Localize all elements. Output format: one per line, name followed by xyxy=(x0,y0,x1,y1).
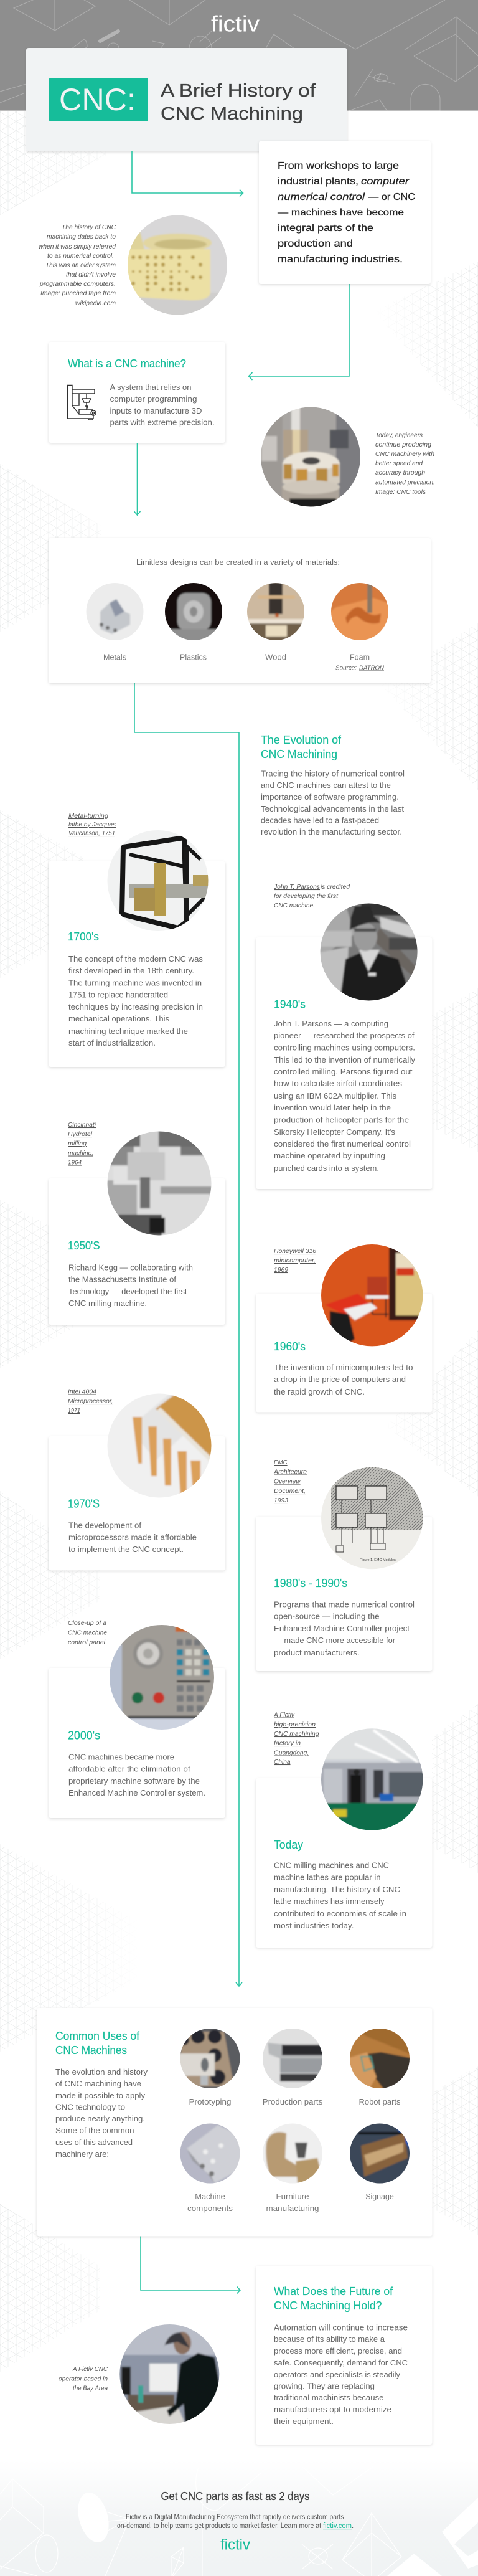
text: common uses: machinery are: xyxy=(55,2149,109,2159)
image: EMC diagram: Figure 1. EMC Modules xyxy=(360,1558,396,1562)
image: Hydrotel milling machine xyxy=(107,1131,212,1236)
labels: materials: Wood xyxy=(265,653,286,661)
caption: operator: the Bay Area xyxy=(73,2384,108,2392)
text: future: traditional machinists because xyxy=(274,2393,383,2402)
text: future: their equipment. xyxy=(274,2417,334,2426)
text: 1940s xyxy=(274,1019,416,1173)
caption: Cincinnati Hydrotel: machine, xyxy=(68,1150,93,1157)
panel: 1700s xyxy=(49,830,225,1067)
caption: lathe: Metal-turning xyxy=(68,812,108,820)
heading: common uses xyxy=(55,2030,140,2057)
title badge: CNC xyxy=(49,78,148,121)
text: common uses: made it possible to apply xyxy=(55,2091,145,2100)
image: EMC diagram xyxy=(321,1467,423,1570)
label: row two: Machine xyxy=(195,2192,225,2201)
caption: John T. Parsons: CNC machine. xyxy=(274,902,315,909)
panel: today xyxy=(256,1725,432,1948)
text: future: growing. They are replacing xyxy=(274,2382,375,2390)
caption: Cincinnati Hydrotel xyxy=(68,1121,96,1166)
heading: 1980s-1990s: 1980's - 1990's xyxy=(274,1577,347,1589)
text: future xyxy=(274,2323,408,2426)
text: 1970s: The development of xyxy=(68,1521,141,1530)
panel: 1980s-1990s xyxy=(256,1467,432,1671)
caption: EMC architecture: Document, xyxy=(274,1487,306,1495)
text: 1970s: to implement the CNC concept. xyxy=(68,1545,184,1554)
panel: intro xyxy=(259,141,431,284)
label: row one: Production parts xyxy=(263,2097,323,2106)
source credit xyxy=(335,664,384,671)
text: today: CNC milling machines and CNC xyxy=(274,1861,389,1870)
text: 1980s-1990s: open-source — including the xyxy=(274,1612,380,1621)
text: future: process more efficient, precise, and xyxy=(274,2346,402,2356)
caption: cutting tool xyxy=(375,432,435,496)
text: common uses: uses of this advanced xyxy=(55,2138,133,2147)
caption: Intel 4004 xyxy=(68,1388,113,1414)
text: 1940s: production of helicopter parts for the xyxy=(274,1115,409,1125)
text: 2000s: Enhanced Machine Controller system. xyxy=(68,1788,205,1797)
text: 1700s: machining technique marked the xyxy=(68,1026,188,1036)
caption: Honeywell 316: Honeywell 316 xyxy=(274,1248,316,1255)
heading: 1950s: 1950'S xyxy=(68,1239,100,1252)
text: 1950s: the Massachusetts Institute of xyxy=(68,1274,176,1284)
text: evolution: importance of software programming. xyxy=(261,792,399,802)
panel: 2000s xyxy=(49,1621,225,1818)
heading: 1700s: 1700's xyxy=(68,930,99,943)
image: lathe xyxy=(107,830,210,931)
title badge: CNC: CNC: xyxy=(59,82,136,117)
caption: Intel 4004: Microprocessor, xyxy=(68,1398,113,1405)
text: today xyxy=(274,1861,406,1930)
text: 1700s: first developed in the 18th century. xyxy=(68,966,194,975)
label: row one: Prototyping xyxy=(189,2097,232,2106)
caption: EMC architecture: Overview xyxy=(274,1477,301,1485)
caption: operator: A Fictiv CNC xyxy=(72,2365,108,2373)
image: cutting tool xyxy=(261,407,360,507)
header band xyxy=(0,0,478,111)
label: row two: Furniture xyxy=(276,2192,309,2201)
heading: future: What Does the Future of xyxy=(274,2285,393,2298)
caption: lathe: lathe by Jacques xyxy=(68,821,116,828)
caption: Honeywell 316 xyxy=(274,1248,316,1274)
caption: operator: operator based in xyxy=(59,2375,108,2383)
text: common uses: of CNC machining have xyxy=(55,2079,141,2088)
label: row two xyxy=(187,2192,394,2213)
image: control panel xyxy=(110,1625,214,1730)
heading: future xyxy=(274,2285,393,2312)
panel: common uses xyxy=(37,2008,432,2236)
footer text: on-demand, to help teams get products to market faster. Learn more at xyxy=(117,2522,322,2530)
caption: punched tape: machining dates back to xyxy=(47,233,116,240)
text: today: machine lathes are popular in xyxy=(274,1872,381,1882)
label: row one xyxy=(189,2097,401,2106)
text: 1700s: The concept of the modern CNC was xyxy=(68,954,203,964)
text: 1940s: This led to the invention of numerically xyxy=(274,1055,416,1064)
arrow: common uses to future xyxy=(141,2236,240,2293)
panel: intro: manufacturing industries. xyxy=(278,254,403,265)
text: common uses: produce nearly anything. xyxy=(55,2114,145,2123)
text: 1700s: The turning machine was invented in xyxy=(68,978,202,988)
caption: cutting tool: continue producing xyxy=(375,441,431,448)
panel: intro: From workshops to large xyxy=(278,161,399,171)
arrow: title to intro xyxy=(132,151,243,197)
text: common uses: Some of the common xyxy=(55,2126,134,2135)
text: 1940s: pioneer — researched the prospects of xyxy=(274,1031,415,1040)
caption: cutting tool: better speed and xyxy=(375,460,423,467)
text: what is a CNC machine: computer programming xyxy=(110,394,197,404)
caption: Cincinnati Hydrotel: milling xyxy=(68,1140,87,1147)
text: 1940s: controlling machines using computers. xyxy=(274,1043,415,1053)
text: 1940s: how to calculate airfoil coordinates xyxy=(274,1079,403,1088)
text: what is a CNC machine: A system that relies on xyxy=(110,382,192,392)
text: today: most industries today. xyxy=(274,1921,354,1930)
caption: cutting tool: automated precision. xyxy=(375,478,435,486)
image: operator xyxy=(120,2324,219,2424)
labels: materials xyxy=(103,653,370,661)
image: signage xyxy=(350,2124,410,2184)
caption: cutting tool: Image: CNC tools xyxy=(375,488,426,496)
caption: punched tape: The history of CNC xyxy=(62,224,116,231)
text: 1960s xyxy=(274,1363,413,1396)
text: materials intro: Limitless designs can be created in a variety of materials: xyxy=(136,557,340,567)
caption: John T. Parsons: is credited xyxy=(321,883,350,891)
image: robot parts xyxy=(350,2029,410,2088)
text: evolution: Tracing the history of numerical control xyxy=(261,769,405,779)
caption: EMC architecture: 1993 xyxy=(274,1497,288,1504)
text: 1960s: a drop in the price of computers and xyxy=(274,1375,406,1384)
panel: 1950s xyxy=(49,1128,225,1325)
source credit: Source: xyxy=(335,664,357,671)
text: 1950s xyxy=(68,1263,193,1308)
heading: common uses: CNC Machines xyxy=(55,2044,127,2057)
label: row two: manufacturing xyxy=(266,2204,319,2213)
text: what is a CNC machine: parts with extreme precision. xyxy=(110,417,214,427)
text: 1700s: mechanical operations. This xyxy=(68,1014,170,1023)
caption: punched tape: that didn't involve xyxy=(66,271,116,278)
footer text: . xyxy=(352,2522,354,2530)
panel: intro: computer xyxy=(361,176,410,187)
text: 1950s: CNC milling machine. xyxy=(68,1299,147,1308)
image: punched tape xyxy=(128,215,227,315)
heading: 1970s: 1970'S xyxy=(68,1497,100,1510)
text: 1940s: controlled milling. Parsons figured out xyxy=(274,1067,413,1076)
image: Intel 4004 xyxy=(107,1394,212,1497)
panel: 1970s xyxy=(49,1390,225,1571)
label: row one: Robot parts xyxy=(358,2097,401,2106)
text: 1970s xyxy=(68,1521,197,1554)
caption: Cincinnati Hydrotel: 1964 xyxy=(68,1158,82,1166)
panel: intro: industrial plants, xyxy=(278,176,358,187)
caption: John T. Parsons xyxy=(273,883,350,909)
heading: evolution: CNC Machining xyxy=(261,748,337,760)
text: today: contributed to economies of scale in xyxy=(274,1909,406,1918)
labels: materials: Foam xyxy=(350,653,370,661)
panel: intro: numerical control xyxy=(278,192,365,202)
image: furniture xyxy=(263,2124,322,2184)
caption: punched tape: wikipedia.com xyxy=(75,300,116,307)
image: wood xyxy=(247,583,304,640)
caption: control panel: control panel xyxy=(68,1639,106,1646)
text: 1700s: techniques by increasing precision in xyxy=(68,1002,203,1011)
panel: intro: integral parts of the xyxy=(278,223,373,234)
text: 1700s xyxy=(68,954,203,1048)
image: factory xyxy=(321,1728,423,1830)
text: 1940s: invention would later help in the xyxy=(274,1103,391,1112)
caption: Honeywell 316: minicomputer, xyxy=(274,1257,316,1264)
text: common uses xyxy=(55,2067,148,2159)
text: 1700s: start of industrialization. xyxy=(68,1038,156,1048)
text: evolution: decades have led to a fast-paced xyxy=(261,816,379,825)
footer heading: Get CNC parts as fast as 2 days xyxy=(161,2490,310,2503)
title text: A Brief History of xyxy=(161,81,316,101)
caption: Fictiv factory: factory in xyxy=(274,1740,301,1747)
caption: Cincinnati Hydrotel: Cincinnati xyxy=(68,1121,96,1129)
label: row two: components xyxy=(187,2204,233,2213)
panel: 1960s xyxy=(256,1241,432,1413)
caption: punched tape: programmable computers. xyxy=(39,280,116,288)
caption: control panel: Close-up of a xyxy=(68,1619,106,1627)
caption: punched tape: to as numerical control. xyxy=(47,252,114,260)
heading: 1940s: 1940's xyxy=(274,998,306,1010)
heading: today: Today xyxy=(274,1839,303,1851)
text: 1980s-1990s: Enhanced Machine Controller project xyxy=(274,1624,410,1633)
caption: Cincinnati Hydrotel: Hydrotel xyxy=(68,1130,93,1138)
heading: common uses: Common Uses of xyxy=(55,2030,140,2042)
text: 1980s-1990s: Programs that made numerical control xyxy=(274,1599,415,1609)
caption: John T. Parsons: for developing the first xyxy=(274,893,339,900)
caption: Honeywell 316: 1969 xyxy=(274,1266,288,1274)
caption: Intel 4004: 1971 xyxy=(68,1407,80,1414)
footer band xyxy=(0,2460,478,2576)
text: common uses: CNC technology to xyxy=(55,2103,125,2111)
footer text xyxy=(117,2514,354,2530)
image: foam xyxy=(331,583,388,640)
text: future: because of its ability to make a xyxy=(274,2334,385,2344)
arrow: intro to what is a CNC machine xyxy=(249,284,349,380)
text: evolution xyxy=(261,769,405,836)
text: 2000s: proprietary machine software by the xyxy=(68,1776,200,1786)
image: machine components xyxy=(180,2124,240,2184)
text: 1700s: 1751 to replace handcrafted xyxy=(68,990,168,999)
text: future: operators and specialists is steadily xyxy=(274,2370,400,2379)
arrow: what is to materials xyxy=(134,443,141,515)
caption: John T. Parsons: John T. Parsons xyxy=(273,883,321,891)
footer text: fictiv.com xyxy=(323,2522,352,2530)
text: today: lathe machines has immensely xyxy=(274,1896,385,1906)
text: 1940s: considered the first numerical control xyxy=(274,1139,411,1148)
text: 1980s-1990s: product manufacturers. xyxy=(274,1648,360,1657)
caption: Fictiv factory: CNC machining xyxy=(274,1730,319,1738)
caption: cutting tool: CNC machinery with xyxy=(375,450,434,458)
text: future: safe. Consequently, demand for CNC xyxy=(274,2358,408,2367)
labels: materials: Metals xyxy=(103,653,126,661)
logo: fictiv footer: fictiv xyxy=(220,2536,250,2554)
title text: CNC Machining xyxy=(161,104,303,124)
text: 1940s: Sikorsky Helicopter Company. It's xyxy=(274,1127,396,1137)
caption: EMC architecture: Architecure xyxy=(273,1469,307,1476)
text: 1960s: the rapid growth of CNC. xyxy=(274,1387,365,1396)
text: 2000s xyxy=(68,1753,205,1797)
caption: lathe xyxy=(68,812,116,837)
text: what is a CNC machine xyxy=(110,382,214,427)
panel: materials xyxy=(49,538,431,683)
caption: punched tape xyxy=(39,224,116,307)
text: 1980s-1990s: — made CNC more accessible for xyxy=(274,1636,396,1645)
caption: control panel: CNC machine xyxy=(68,1629,107,1637)
text: 2000s: CNC machines became more xyxy=(68,1753,174,1761)
caption: EMC architecture: EMC xyxy=(274,1459,288,1466)
caption: Fictiv factory: A Fictiv xyxy=(273,1712,295,1719)
text: 1940s: John T. Parsons — a computing xyxy=(274,1019,388,1028)
image: prototyping xyxy=(180,2029,240,2088)
panel: intro: production and xyxy=(278,239,353,249)
footer text: Fictiv is a Digital Manufacturing Ecosystem that rapidly delivers custom parts xyxy=(126,2514,344,2521)
caption: Fictiv factory: Guangdong, xyxy=(274,1749,309,1756)
label: row two: Signage xyxy=(365,2192,394,2201)
text: what is a CNC machine: inputs to manufacture 3D xyxy=(110,406,202,415)
panel: what is a CNC machine xyxy=(49,342,225,443)
panel: future xyxy=(256,2266,432,2445)
caption: cutting tool: accuracy through xyxy=(375,469,425,476)
title text xyxy=(161,81,316,124)
panel: intro: — or CNC xyxy=(368,192,415,202)
heading: future: CNC Machining Hold? xyxy=(274,2299,382,2312)
text: 1980s-1990s xyxy=(274,1599,415,1657)
heading: 2000s: 2000's xyxy=(68,1729,100,1741)
image: production parts xyxy=(263,2029,322,2088)
text: common uses: The evolution and history xyxy=(55,2067,148,2076)
caption: operator xyxy=(59,2365,108,2392)
text: future: manufacturers opt to modernize xyxy=(274,2405,391,2414)
caption: cutting tool: Today, engineers xyxy=(375,432,423,439)
caption: Fictiv factory: China xyxy=(274,1758,291,1766)
heading: 1960s: 1960's xyxy=(274,1340,306,1353)
caption: Intel 4004: Intel 4004 xyxy=(68,1388,96,1395)
text: 1940s: using an IBM 602A multiplier. This xyxy=(274,1091,396,1101)
caption: EMC architecture xyxy=(273,1459,307,1504)
logo: fictiv header: fictiv xyxy=(211,11,260,36)
text: 1940s: punched cards into a system. xyxy=(274,1163,379,1173)
caption: punched tape: This was an older system xyxy=(45,262,116,269)
heading: evolution: The Evolution of xyxy=(261,734,342,746)
text: 1950s: Technology — developed the first xyxy=(68,1287,187,1296)
image: John T. Parsons xyxy=(320,903,418,1000)
source credit: DATRON xyxy=(359,664,384,671)
text: 2000s: affordable after the elimination of xyxy=(68,1764,190,1774)
image: plastics xyxy=(165,583,222,640)
title panel xyxy=(26,48,347,151)
image: Honeywell minicomputer xyxy=(321,1244,423,1347)
text: future: Automation will continue to increase xyxy=(274,2323,408,2332)
caption: Fictiv factory: high-precision xyxy=(274,1721,316,1728)
caption: control panel xyxy=(68,1619,107,1646)
arrow: materials to evolution xyxy=(134,683,242,1986)
image: metals xyxy=(86,583,143,640)
caption: Fictiv factory xyxy=(273,1712,319,1766)
text: today: manufacturing. The history of CNC xyxy=(274,1885,400,1894)
text: 1960s: The invention of minicomputers led to xyxy=(274,1363,413,1372)
heading: what is a CNC machine: What is a CNC machine? xyxy=(68,358,186,370)
panel: intro: — machines have become xyxy=(278,207,404,218)
caption: punched tape: when it was simply referred xyxy=(39,243,116,250)
text: evolution: Technological advancements in the last xyxy=(261,804,404,813)
panel: 1940s xyxy=(256,900,432,1189)
text: 1950s: Richard Kegg — collaborating with xyxy=(68,1263,193,1272)
text: 1940s: machine operated by inputting xyxy=(274,1151,385,1160)
labels: materials: Plastics xyxy=(180,653,207,661)
text: evolution: and CNC machines can attest to the xyxy=(261,780,391,790)
caption: punched tape: Image: punched tape from xyxy=(40,290,116,297)
text: evolution: revolution in the manufacturing sector. xyxy=(261,827,402,836)
text: 1970s: microprocessors made it affordable xyxy=(68,1532,197,1542)
icon: CNC machine xyxy=(67,385,96,420)
heading: evolution xyxy=(261,734,342,760)
caption: lathe: Vaucanson, 1751 xyxy=(68,830,115,837)
